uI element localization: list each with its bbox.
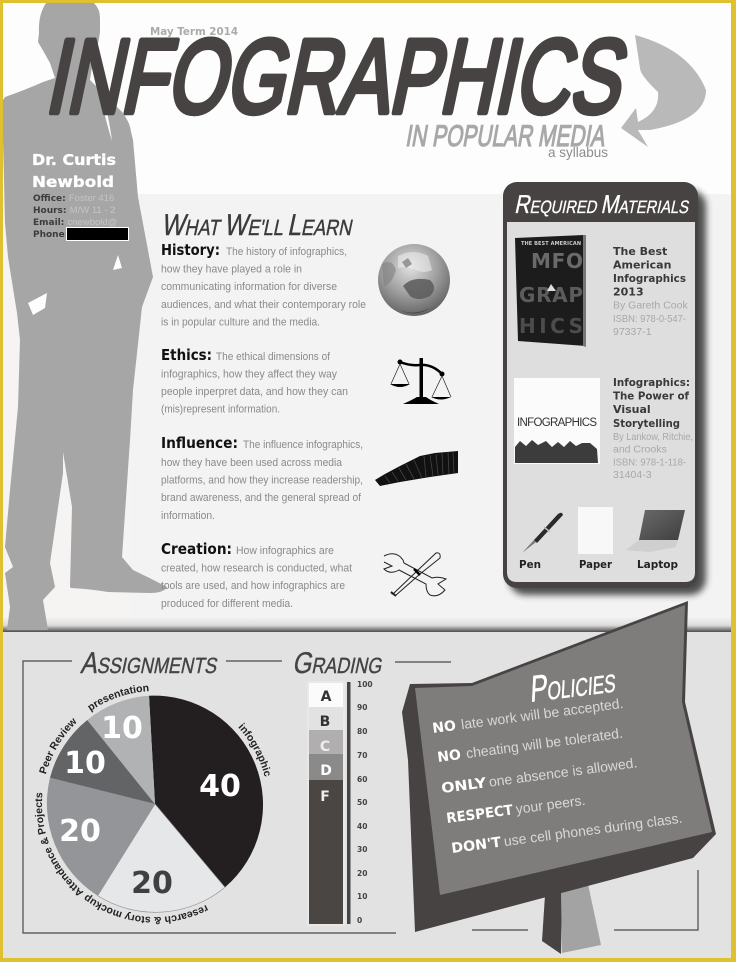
grading scale bar: C <box>320 739 330 755</box>
text block: ethics <box>161 346 348 416</box>
text: book two details: By Lankow, Ritchie, <box>613 431 693 443</box>
heading: assignments: ASSIGNMENTS <box>79 647 221 680</box>
heading: policies: POLICIES <box>530 657 617 710</box>
text block: creation: Creation: <box>161 540 232 558</box>
book cover: the best american infographics: THE BEST AMERICAN <box>521 241 581 247</box>
text: book one details: The Best <box>613 245 667 258</box>
panel: required materials <box>503 182 706 595</box>
text block: influence: The influence infographics, <box>243 439 363 451</box>
icon: curved arrow <box>621 35 706 147</box>
text: book one details: Infographics <box>613 272 686 285</box>
frame lines <box>23 661 698 933</box>
heading: required materials: REQUIRED MATERIALS <box>513 189 693 219</box>
policy rules: your peers. <box>515 792 586 817</box>
pie labels <box>34 685 270 924</box>
axis tick labels <box>357 680 373 925</box>
icon: falling dominoes <box>375 451 458 486</box>
text: book one details: By Gareth Cook <box>613 300 688 312</box>
text: book two details: Storytelling <box>613 417 680 430</box>
axis tick labels: 100 <box>357 680 373 689</box>
pie chart: assignments: 20 <box>59 814 101 849</box>
policy rules: late work will be accepted. <box>460 695 624 732</box>
material labels: Paper <box>579 558 613 571</box>
pie chart: assignments: 20 <box>131 866 173 901</box>
material labels <box>519 558 678 571</box>
policy rules: RESPECT <box>445 802 514 827</box>
pie labels: Peer Review <box>39 718 76 774</box>
axis tick labels: 20 <box>357 869 367 878</box>
axis tick labels: 60 <box>357 775 367 784</box>
policy rules: one absence is allowed. <box>488 754 638 790</box>
text block: creation: produced for different media. <box>161 598 293 610</box>
policy rules: NO <box>431 718 457 737</box>
sign post <box>542 884 601 954</box>
pie labels: Attendance & Projects <box>34 792 84 896</box>
text: book one details: 97337-1 <box>613 326 652 338</box>
book cover: infographics the power of visual storytelling: INFOGRAPHICS <box>517 417 597 429</box>
axis tick labels: 90 <box>357 703 367 712</box>
text block: creation <box>161 540 352 610</box>
axis tick labels: 50 <box>357 798 367 807</box>
book cover: the best american infographics: GRAP <box>519 283 583 307</box>
text block: history: how they have played a role in <box>161 264 302 276</box>
instructor contact details: Phone: <box>33 230 68 240</box>
policies sign <box>402 601 716 954</box>
axis tick labels: 70 <box>357 751 367 760</box>
pie labels: presentation <box>88 685 149 713</box>
text block: influence <box>161 434 363 522</box>
text block: ethics: Ethics: <box>161 346 212 364</box>
text: book one details: ISBN: 978-0-547- <box>613 313 686 325</box>
instructor contact details: Email: cnewbold@ <box>33 217 117 228</box>
axis tick labels: 30 <box>357 845 367 854</box>
subtitle: IN POPULAR MEDIA <box>404 120 609 153</box>
book cover: the best american infographics: HICS <box>519 314 583 338</box>
pie chart: assignments: 10 <box>101 711 143 746</box>
text: book two details: The Power of <box>613 390 689 402</box>
text block: ethics: (mis)represent information. <box>161 404 280 416</box>
text block: influence: how they have been used across media <box>161 457 343 469</box>
icon: wrench and screwdriver <box>384 553 446 596</box>
sign board <box>402 601 716 932</box>
text block: creation: tools are used, and how infographics are <box>161 580 345 592</box>
pie chart: assignments: 40 <box>199 769 241 804</box>
policy rules: cheating will be tolerated. <box>465 725 624 761</box>
text block: influence: information. <box>161 510 215 522</box>
axis tick labels: 10 <box>357 892 367 901</box>
instructor contact details: Office: Foster 416 <box>33 193 114 204</box>
text block: history: The history of infographics, <box>226 246 347 258</box>
instructor contact details: Hours: M/W 11 - 2 <box>33 205 115 216</box>
grading scale bar <box>307 680 373 926</box>
axis tick labels: 80 <box>357 727 367 736</box>
grading scale bar: A <box>321 689 332 705</box>
text block: history: History: <box>161 241 220 259</box>
text block: history: is in popular culture and the media. <box>161 316 320 328</box>
text block: history <box>161 241 366 328</box>
text block: influence: Influence: <box>161 434 238 452</box>
pie labels: infographic <box>238 722 270 776</box>
pie chart: assignments <box>34 685 270 924</box>
axis tick labels: 40 <box>357 822 367 831</box>
text: book two details <box>613 376 693 481</box>
icon: paper <box>578 507 613 554</box>
syllabus label: a syllabus <box>548 144 608 160</box>
term label: May Term 2014 <box>150 26 238 38</box>
text block: influence: brand awareness, and the general spread of <box>161 492 362 504</box>
text: book two details: ISBN: 978-1-118- <box>613 456 686 468</box>
text: book two details: and Crooks <box>613 444 667 456</box>
book cover: infographics the power of visual storytelling <box>514 378 600 464</box>
policy rules: use cell phones during class. <box>503 810 683 849</box>
text block: ethics: people inperpret data, and how they can <box>161 386 348 398</box>
text: book one details <box>613 245 688 338</box>
heading: what we'll learn: WHAT WE'LL LEARN <box>160 209 356 242</box>
grading scale bar: B <box>320 714 330 730</box>
policy rules <box>431 695 683 857</box>
policy rules: DON'T <box>450 835 503 857</box>
silhouette of instructor <box>3 3 167 630</box>
text block: influence: platforms, and how they increase readership, <box>161 474 363 486</box>
material labels: Laptop <box>637 558 678 571</box>
grading scale bar: D <box>320 763 332 779</box>
icon: pen <box>522 513 563 553</box>
instructor contact details <box>32 151 129 241</box>
axis tick labels: 0 <box>357 916 362 925</box>
text: book one details: 2013 <box>613 286 644 298</box>
icon: laptop <box>626 510 685 552</box>
icon: globe <box>378 244 450 316</box>
text: book two details: Visual <box>613 403 651 416</box>
pie chart: assignments: 10 <box>64 746 106 781</box>
text block: creation: created, how research is conducted, what <box>161 562 352 574</box>
text block: creation: How infographics are <box>236 545 334 557</box>
policy rules: ONLY <box>440 775 488 797</box>
material labels: Pen <box>519 558 541 571</box>
text block: history: audiences, and what their contemporary role <box>161 299 366 311</box>
instructor contact details: Dr. Curtis <box>32 151 116 169</box>
policy rules: NO <box>436 747 462 766</box>
text block: ethics: The ethical dimensions of <box>216 351 331 363</box>
instructor contact details: Newbold <box>32 173 114 191</box>
book cover: the best american infographics <box>515 235 586 347</box>
pie labels: research & story mockup <box>84 894 208 924</box>
text: book two details: Infographics: <box>613 376 690 389</box>
icon: scales <box>390 358 451 404</box>
heading: grading: GRADING <box>291 647 386 680</box>
text: book two details: 31404-3 <box>613 469 652 481</box>
text: book one details: American <box>613 258 671 272</box>
text block: ethics: infographics, how they affect they way <box>161 368 337 380</box>
text block: history: communicating information for diverse <box>161 281 337 293</box>
grading scale bar: F <box>320 789 330 805</box>
book cover: the best american infographics: MFO <box>531 249 583 273</box>
